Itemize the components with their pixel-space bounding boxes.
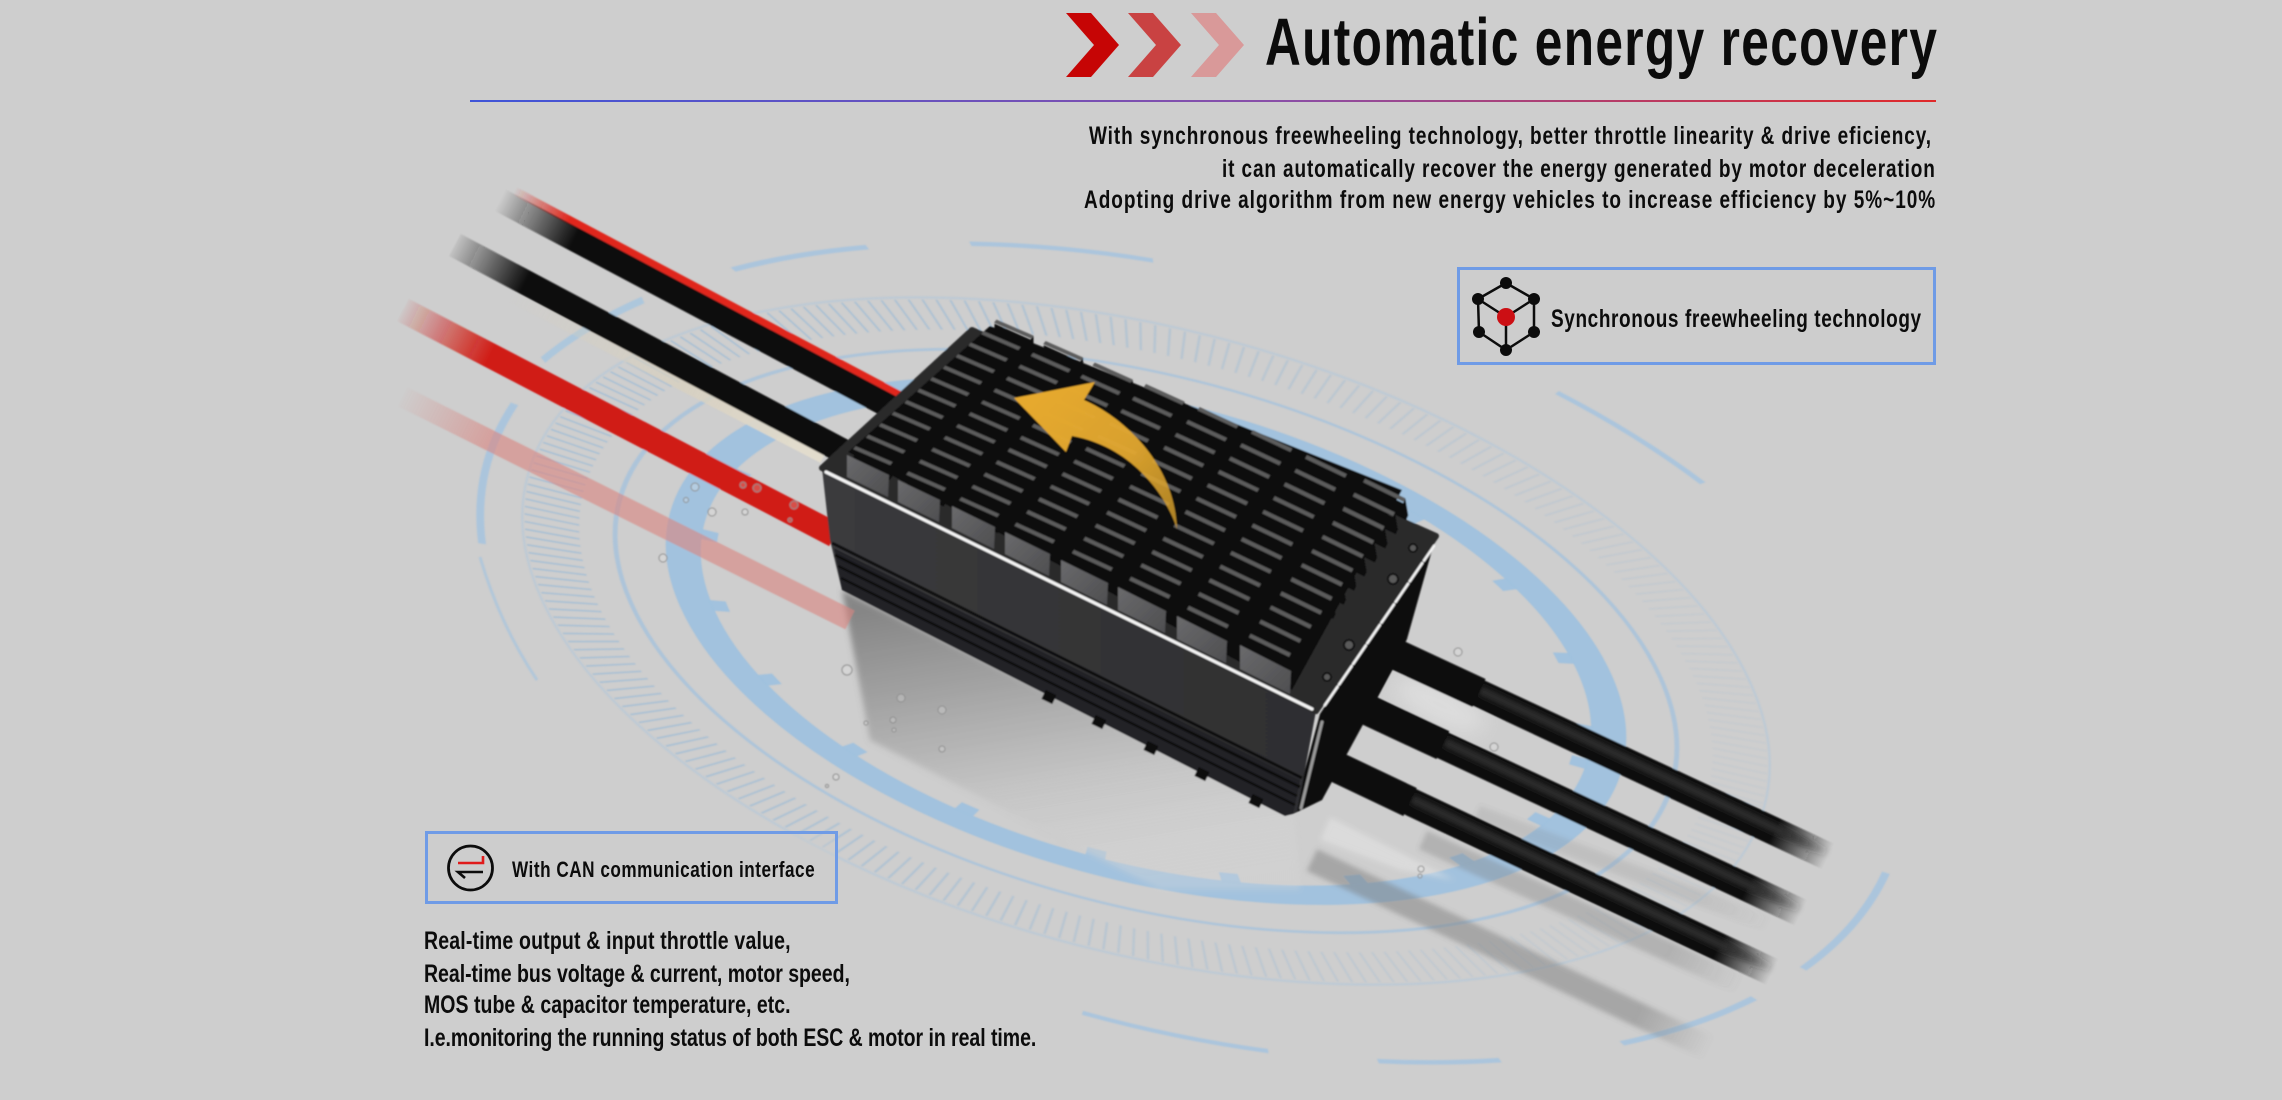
reflection under controller xyxy=(842,590,1494,890)
left input cables xyxy=(403,191,905,620)
title rule xyxy=(470,100,1936,102)
title: Automatic energy recovery xyxy=(1265,6,1937,80)
water droplets xyxy=(659,482,1498,878)
end face xyxy=(1293,543,1434,814)
black cable rear xyxy=(500,200,900,412)
lower grooves xyxy=(832,543,1302,816)
callout label: Synchronous freewheeling technology xyxy=(1551,304,1922,333)
product artwork xyxy=(403,191,1886,1092)
monitoring text: Real-time bus voltage & current, motor speed, xyxy=(424,960,850,988)
title chevrons xyxy=(1066,13,1244,77)
callout: CAN communication interface xyxy=(426,832,836,902)
callout: synchronous freewheeling technology xyxy=(1458,268,1934,364)
monitoring text: I.e.monitoring the running status of both ESC & motor in real time. xyxy=(424,1024,1036,1052)
cable 2 xyxy=(1355,704,1810,917)
cable 1 xyxy=(1395,654,1840,862)
icon: curved energy recovery arrow xyxy=(1014,382,1177,529)
dark fin bed xyxy=(848,326,1402,690)
rear red strip xyxy=(515,191,905,398)
end screws xyxy=(1323,544,1417,681)
black cable front xyxy=(455,245,850,455)
cable 3 xyxy=(1330,764,1785,978)
top plate xyxy=(822,330,1436,711)
description text: Adopting drive algorithm from new energy vehicles to increase efficiency by 5%~10% xyxy=(1084,185,1935,214)
description text: it can automatically recover the energy generated by motor deceleration xyxy=(1222,154,1935,183)
monitoring text xyxy=(424,927,1036,1052)
white edge highlights xyxy=(826,472,1434,808)
callout label: With CAN communication interface xyxy=(512,858,815,883)
lower notches xyxy=(1041,690,1264,808)
icon: bidirectional arrows xyxy=(448,846,492,890)
cable reflections xyxy=(1312,813,1805,1058)
front face xyxy=(822,468,1316,816)
monitoring text: Real-time output & input throttle value, xyxy=(424,927,791,955)
monitoring text: MOS tube & capacitor temperature, etc. xyxy=(424,991,791,1019)
red cable reflection xyxy=(403,397,850,620)
blue concentric gauge rings xyxy=(467,197,1886,1092)
description text xyxy=(1084,121,1935,214)
cream reflection strip xyxy=(510,296,823,458)
right output cables xyxy=(1330,654,1840,978)
description text: With synchronous freewheeling technology, better throttle linearity & drive eficiency, xyxy=(1089,121,1931,150)
icon: cube network xyxy=(1472,277,1540,356)
heat sink fin columns xyxy=(853,320,1436,675)
ESC controller body xyxy=(822,320,1436,816)
front tabs xyxy=(847,455,1291,694)
red power cable xyxy=(403,310,835,535)
